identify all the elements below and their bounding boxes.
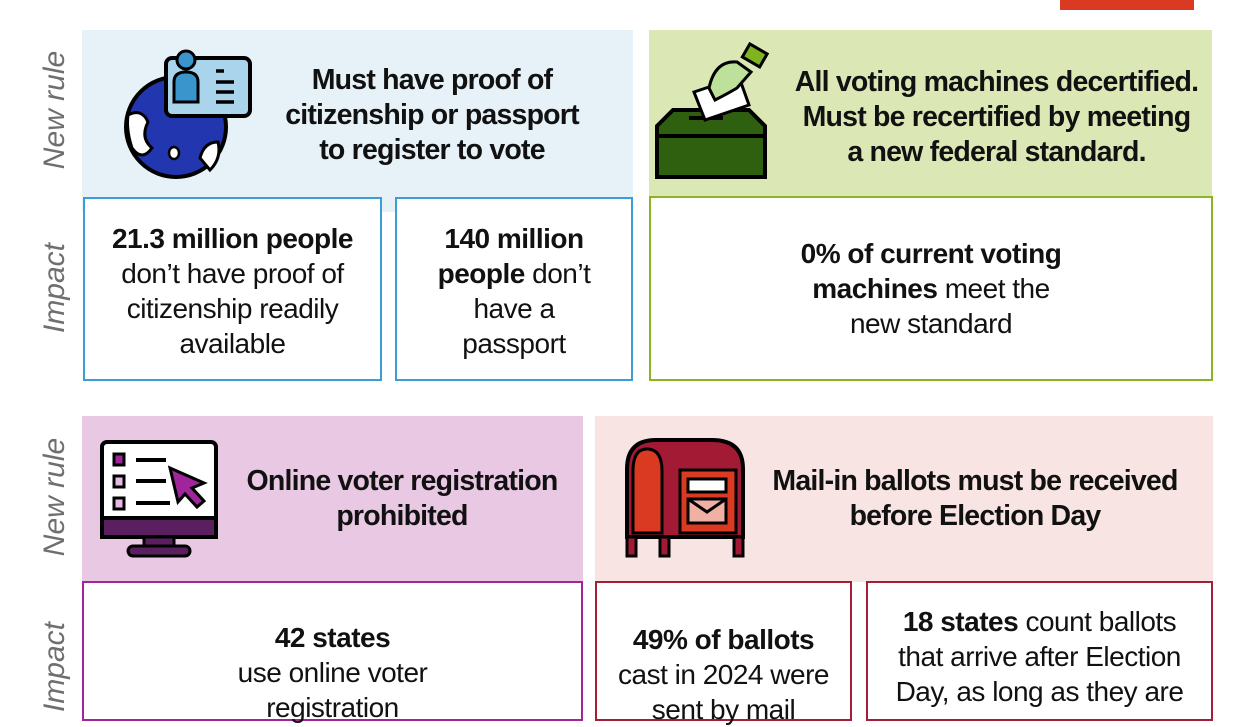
impact: 140 million: people don’t: [438, 258, 590, 289]
impact: 21.3 million: available: [179, 328, 286, 359]
panel: mail-in rule: [595, 416, 1213, 582]
impact: 18 states: 18 states count ballots: [903, 606, 1176, 637]
impact: 42 states: [82, 581, 583, 721]
impact: 18 states: Day, as long as they are: [896, 676, 1183, 707]
heading: Online voter registration: [246, 465, 557, 497]
impact: 140 million: [395, 197, 633, 381]
side label: new rule bottom: New rule: [38, 438, 71, 556]
impact: 42 states: registration: [266, 692, 399, 723]
panel: citizenship rule: [82, 30, 633, 212]
heading: Must have proof of: [312, 64, 552, 96]
panel: online registration rule: [82, 416, 583, 582]
heading: citizenship or passport: [285, 99, 579, 131]
icon: mailbox: [625, 438, 745, 558]
icon: globe with ID: [124, 50, 252, 179]
impact: 21.3 million: don’t have proof of: [121, 258, 344, 289]
heading: [285, 64, 580, 166]
heading: prohibited: [336, 500, 468, 532]
impact: 0% machines: machines meet the: [812, 273, 1050, 304]
impact: 140 million: 140 million: [444, 223, 584, 254]
red tag top right: [1060, 0, 1194, 10]
heading: [772, 465, 1178, 532]
impact: 0% machines: [649, 196, 1213, 381]
heading: [795, 66, 1198, 168]
impact: 18 states: that arrive after Election: [898, 641, 1181, 672]
side label: impact bottom: Impact: [38, 622, 71, 712]
heading: Mail-in ballots must be received: [772, 465, 1178, 497]
panel: voting machines rule: [649, 30, 1212, 198]
heading: to register to vote: [319, 134, 545, 166]
impact: 21.3 million: 21.3 million people: [112, 223, 353, 254]
impact: 18 states: [866, 581, 1213, 721]
impact: 49% of ballots: 49% of ballots: [633, 624, 814, 655]
impact: 140 million: have a: [473, 293, 555, 324]
impact: 42 states: 42 states: [275, 622, 390, 653]
impact: 21.3 million: [83, 197, 382, 381]
heading: [246, 465, 557, 532]
impact: 21.3 million: citizenship readily: [127, 293, 338, 324]
side label: new rule top: New rule: [38, 51, 71, 169]
impact: 140 million: passport: [462, 328, 566, 359]
heading: All voting machines decertified.: [795, 66, 1198, 98]
impact: 49% of ballots: [595, 581, 852, 721]
icon: monitor with cursor: [100, 440, 218, 558]
impact: 49% of ballots: sent by mail: [652, 694, 795, 725]
heading: Must be recertified by meeting: [803, 101, 1190, 133]
side label: impact top: Impact: [38, 243, 71, 333]
impact: 49% of ballots: cast in 2024 were: [618, 659, 829, 690]
impact: 42 states: use online voter: [238, 657, 427, 688]
icon: ballot box: [655, 42, 770, 179]
heading: a new federal standard.: [847, 136, 1146, 168]
impact: 0% machines: 0% of current voting: [801, 238, 1061, 269]
impact: 0% machines: new standard: [850, 308, 1012, 339]
heading: before Election Day: [850, 500, 1100, 532]
